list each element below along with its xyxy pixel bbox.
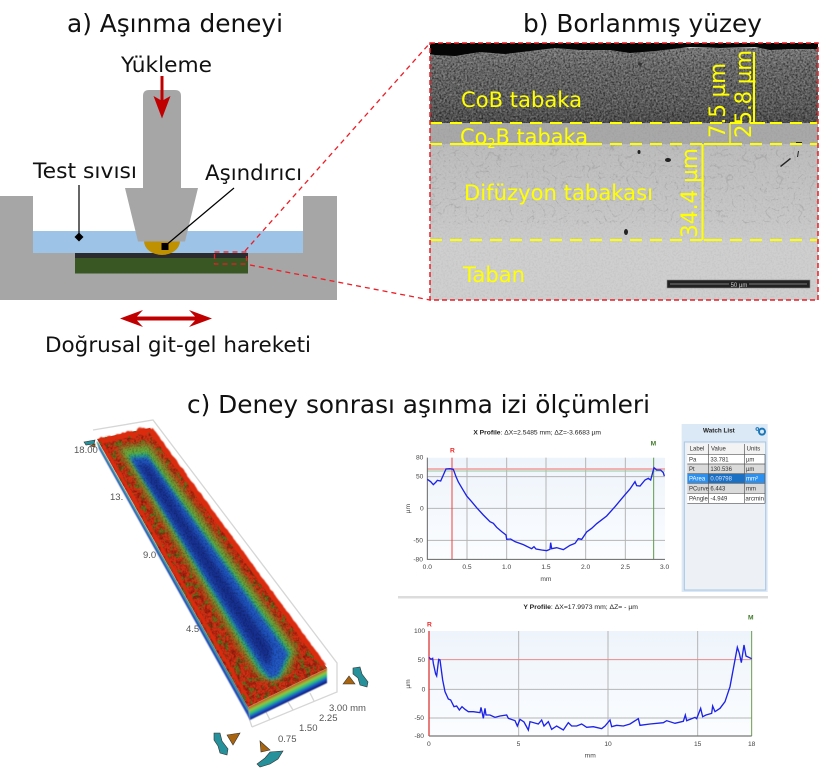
table text: Value [711,447,727,453]
layer labels: CoB tabaka [461,88,582,112]
panel b: borided surface [430,9,818,300]
axis ticks: 10 [604,741,612,748]
axis ticks: 50 [416,474,424,481]
panel a: wear test [0,9,430,357]
sample [75,253,248,274]
layer labels: Taban [462,263,525,287]
axis labels: 3.00 mm [329,703,366,714]
axis ticks: 50 [418,657,425,664]
axis ticks: µm [405,503,412,513]
axis labels: 1.50 [299,723,318,734]
table text: PArea [689,477,706,483]
wear track surface [97,428,327,707]
axis labels: 4.5 [186,624,199,635]
axis ticks: -50 [414,715,424,722]
table text: PAngle [689,496,709,502]
axis ticks: 2.5 [621,564,630,571]
arrow: loading [154,76,170,118]
outer panel [682,424,768,592]
axis labels: 18.00 [74,445,98,456]
divider between profiles [398,596,768,598]
table text [689,447,764,502]
table text: mm² [746,477,758,483]
axis ticks: 0.0 [423,564,432,571]
axis ticks: 3.0 [660,564,670,571]
axis ticks: 5 [517,741,521,748]
rough red rim peaks [100,430,324,703]
layer labels: B tabaka [496,125,588,149]
marker labels [427,614,754,629]
test bath body [0,196,337,300]
pointer: test liquid [74,185,84,242]
table text: 0.09798 [710,477,733,483]
micrograph [430,43,818,300]
profile curve [429,645,752,730]
axis ticks: 18 [748,741,756,748]
axis ticks: 0 [422,686,426,693]
chart: Y profile [405,604,756,759]
scale bar: 50 µm [731,283,747,289]
scale bar [667,280,810,289]
axis ticks: -80 [413,556,423,563]
label: loading: Yükleme [120,53,212,77]
axis ticks: -80 [414,733,424,740]
profile curve [427,468,664,551]
marker labels: R [427,622,432,629]
plot area [429,631,752,736]
axis labels: 0.75 [278,734,296,745]
table rows [687,444,765,503]
table text: 130.536 [710,467,733,473]
axis ticks [405,455,670,583]
reference lines [427,458,665,559]
grid [427,458,665,559]
axis labels: 2.25 [319,713,338,724]
3D surface map [74,420,368,767]
axis ticks: 80 [416,455,424,462]
rotation handles [84,440,368,767]
axis ticks: 0 [427,741,431,748]
thickness labels: 7.5 µm [706,63,731,138]
axis ticks: 15 [694,741,702,748]
layer boundaries [430,52,818,240]
axis ticks: 1.5 [541,564,551,571]
side walls [97,441,327,720]
table text: Units [747,447,760,453]
axis ticks [405,628,756,759]
zoom marker and leader lines [214,43,430,300]
table text: Label [690,447,704,453]
axis labels: 9.0 [143,550,156,561]
thickness labels [678,50,757,238]
table text: Pt [689,467,695,473]
chart: X profile [405,430,670,583]
table text: arcmin [745,496,764,502]
grid [429,631,752,736]
table text: PCurve [689,486,710,492]
micrograph border [430,43,818,300]
table text: mm [746,486,756,492]
axis ticks: -50 [413,537,423,544]
panel c: post-test wear track measurements [74,390,768,767]
layer labels: Co [460,125,488,149]
table text: 33.781 [710,457,729,463]
watch list table [682,424,768,592]
layer labels: 2 [487,137,496,152]
pointer: abrasive [162,188,234,250]
axis ticks: mm [540,576,552,583]
table text: -4.949 [710,496,728,502]
label: abrasive: Aşındırıcı [205,161,302,185]
table text: 6.443 [710,486,726,492]
chart title: X Profile: ΔX=2.5485 mm; ΔZ=-3.6683 µm [473,430,601,437]
axis labels: 13. [110,492,123,503]
marker labels: M [651,441,657,448]
marker labels: R [450,447,455,454]
panel title: Watch List [703,428,736,435]
heading: b) borided surface: b) Borlanmış yüzey [523,9,762,38]
thickness labels: 25.8 µm [732,50,757,138]
heading: c) measurements: c) Deney sonrası aşınma izi ölçümleri [187,390,650,419]
axis ticks: 0.5 [462,564,472,571]
table text: Pa [689,457,697,463]
layer labels [460,88,653,287]
test liquid [33,231,303,253]
axis ticks: 100 [414,628,425,635]
plot area [427,458,665,559]
indenter [125,90,198,242]
axis labels [74,445,366,745]
inner panel [684,442,766,590]
axis ticks: µm [405,679,412,689]
axis ticks: 2.0 [581,564,591,571]
marker labels [450,441,657,454]
abrasive ball [144,241,180,255]
heading: a) wear test: a) Aşınma deneyi [67,9,283,38]
label: test liquid: Test sıvısı [32,159,137,183]
axis frame [93,420,337,727]
arrow: reciprocating motion [120,310,212,327]
label: reciprocating motion: Doğrusal git-gel hareketi [45,333,311,357]
layer labels: Difüzyon tabakası [464,181,653,205]
icon: settings gear [756,428,765,435]
chart title: Y Profile: ΔX=17.9973 mm; ΔZ= - µm [523,604,638,611]
axis ticks: mm [585,752,596,759]
axis ticks: 0 [420,505,424,512]
thickness labels: 34.4 µm [678,148,703,238]
table text: µm [746,467,754,473]
reference lines [429,631,752,736]
table text: µm [746,457,754,463]
axis ticks: 1.0 [502,564,512,571]
marker labels: M [748,614,754,621]
